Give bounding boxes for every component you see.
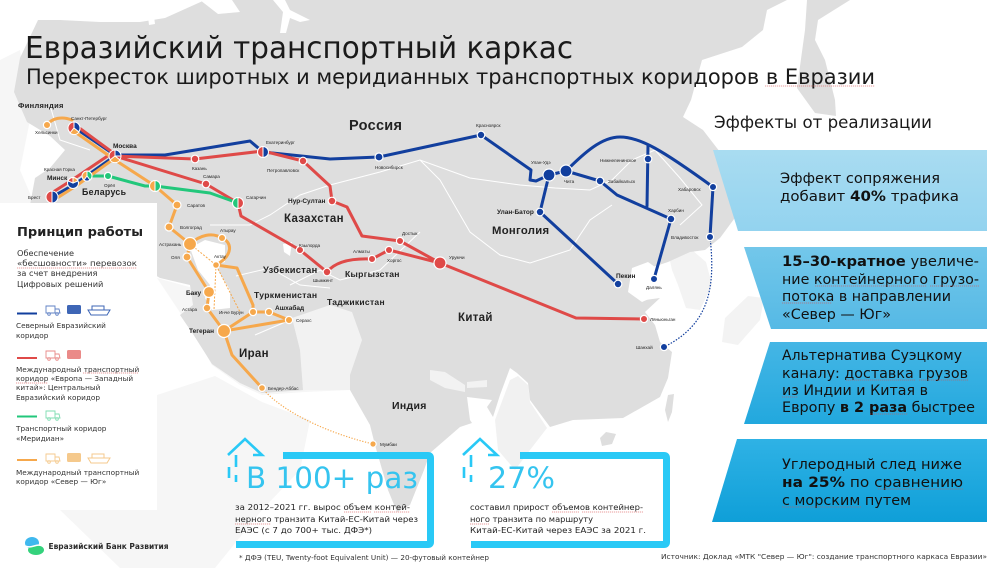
legend: north Eurasian corridor: коридор — [16, 331, 49, 340]
city labels: Екатеринбург — [266, 140, 295, 145]
country labels: Финляндия — [18, 101, 64, 110]
city labels: Шымкент — [313, 278, 334, 283]
country labels: Казахстан — [284, 213, 344, 225]
panel: effect 4: на 25% по сравнению — [782, 475, 963, 491]
panel: effect 3: каналу: доставка грузов — [782, 366, 968, 382]
callout: 100+ times: за 2012–2021 гг. вырос объем контей- — [235, 503, 410, 512]
icon: arrow up — [228, 439, 262, 482]
legend: north Eurasian corridor: Северный Евразийский — [16, 321, 106, 330]
city labels: Саратов — [187, 203, 206, 208]
panel: effect 3: Европу в 2 раза быстрее — [782, 400, 975, 416]
city labels: Баку — [186, 290, 202, 297]
city labels: Пекин — [616, 273, 636, 280]
city labels: Новосибирск — [375, 165, 404, 170]
city labels: Урумчи — [449, 255, 465, 260]
panel: effect 4 — [712, 439, 987, 522]
city labels — [28, 116, 701, 447]
panel: effect 4: с морским путем — [782, 493, 911, 509]
city labels: Ашхабад — [275, 304, 304, 312]
legend: Europe — Western China corridor: китай»: Центральный — [16, 383, 101, 392]
corridor: Meridian (green) — [87, 176, 238, 203]
panel: effect 2: потока в направлении — [782, 289, 951, 305]
city labels: Петропавловск — [267, 168, 300, 173]
city labels: Кзылорда — [299, 243, 321, 248]
legend: Europe — Western China corridor: Евразийский коридор — [16, 393, 100, 402]
country labels: Китай — [458, 312, 493, 324]
corridor: North Eurasian (blue) — [52, 132, 713, 284]
city labels: Астрахань — [159, 242, 182, 247]
city labels: Нижнеленинское — [600, 158, 637, 163]
callout: 27%: Китай-ЕС-Китай через ЕАЭС за 2021 г. — [470, 526, 646, 535]
country labels: Иран — [239, 348, 269, 360]
city labels: Ляньюньган — [650, 317, 676, 322]
callout: 100+ times: ЕАЭС (с 7 до 700+ тыс. ДФЭ*) — [235, 526, 372, 535]
city labels: Далянь — [646, 285, 662, 290]
country labels: Россия — [349, 118, 402, 134]
city labels: Чита — [564, 179, 575, 184]
city labels: Достык — [402, 231, 418, 236]
country labels: Кыргызстан — [345, 269, 400, 279]
legend: Europe — Western China corridor: коридор «Европа — Западный — [16, 374, 133, 383]
callout: 100+ times — [228, 439, 430, 544]
country labels — [18, 101, 549, 412]
city labels: Хабаровск — [678, 187, 701, 192]
panel: how it works legend — [0, 203, 157, 510]
panel: effect 2: «Север — Юг» — [782, 307, 891, 323]
country labels: Туркменистан — [254, 290, 317, 300]
city labels: Астара — [182, 307, 198, 312]
legend: north Eurasian corridor — [16, 305, 110, 340]
city labels: Москва — [113, 143, 137, 150]
callout: 100+ times: нерного транзита Китай-ЕС-Китай через — [235, 515, 418, 524]
country labels: Таджикистан — [327, 297, 385, 307]
panel: effect 2: 15–30-кратное увеличе- — [782, 254, 979, 270]
legend: Meridian corridor: «Меридиан» — [16, 434, 64, 443]
callout: 27%: 27% — [488, 461, 555, 495]
city labels: Волгоград — [180, 225, 202, 230]
legend: Meridian corridor: Транспортный коридор — [15, 424, 107, 433]
city labels: Минск — [47, 175, 68, 182]
panel: effect 3: Альтернатива Суэцкому — [782, 348, 962, 364]
country labels: Монголия — [492, 225, 549, 237]
subtitle: Перекресток широтных и меридианных транспортных коридоров в Евразии — [26, 65, 875, 89]
city labels: Улан-Батор — [497, 209, 534, 216]
source: Источник: Доклад «МТК "Север — Юг": создание транспортного каркаса Евразии» — [661, 553, 987, 561]
panel: effect 2: ние контейнерного грузо- — [782, 272, 979, 288]
legend intro text: Обеспечение — [17, 248, 74, 258]
logo: Eurasian Development Bank: Евразийский Банк Развития — [48, 542, 168, 551]
city labels: Красная Горка — [44, 167, 75, 172]
city labels: Шанхай — [636, 344, 653, 350]
city nodes — [43, 121, 717, 447]
legend: Europe — Western China corridor: Международный транспортный — [16, 365, 139, 374]
legend: North — South corridor — [16, 453, 139, 486]
city labels: Самара — [203, 174, 220, 179]
legend: Europe — Western China corridor — [16, 350, 139, 402]
city labels: Тегеран — [189, 328, 214, 335]
callout: 100+ times: В 100+ раз — [246, 461, 418, 495]
city labels: Улан-Удэ — [531, 160, 551, 165]
city labels: Сагарчин — [246, 195, 266, 200]
city labels: Красноярск — [476, 123, 502, 128]
city labels: Нур-Султан — [288, 198, 326, 205]
country labels: Беларусь — [82, 187, 127, 197]
city labels: Брест — [28, 195, 41, 200]
city labels: Оля — [171, 255, 180, 260]
multi-corridor hubs — [46, 122, 268, 208]
title: Евразийский транспортный каркас — [25, 31, 573, 66]
city labels: Хоргос — [387, 258, 402, 263]
city labels: Мумбаи — [380, 442, 397, 447]
map: corridors — [18, 101, 717, 447]
legend: Meridian corridor — [15, 411, 107, 443]
legend intro text: за счет внедрения — [17, 268, 98, 278]
footnote: * ДФЭ (TEU, Twenty-foot Equivalent Unit) — 20-футовый контейнер — [239, 554, 490, 562]
legend intro text: Цифровых решений — [17, 279, 103, 289]
panel: effect 3 — [744, 342, 987, 424]
legend: North — South corridor: Международный транспортный — [16, 468, 139, 477]
callout frame — [471, 456, 666, 544]
city labels: Атырау — [220, 228, 236, 233]
city labels: Инче Бурун — [219, 310, 244, 315]
legend intro text: «бесшовности» перевозок — [17, 258, 137, 268]
city labels: Хельсинки — [35, 130, 58, 135]
city labels: Серахс — [296, 318, 312, 323]
legend heading: Принцип работы — [17, 225, 143, 239]
callout: 27% — [463, 439, 666, 544]
icon: arrow up — [463, 439, 497, 482]
panel: effect 1: Эффект сопряжения — [780, 171, 940, 187]
panel: effect 1: добавит 40% трафика — [780, 189, 959, 205]
title — [25, 31, 875, 89]
city labels: Казань — [192, 166, 207, 171]
corridor: Europe — Western China (red) — [50, 127, 644, 319]
city labels: Санкт-Петербург — [71, 116, 107, 121]
panel: effect 2 — [744, 247, 987, 329]
callout: 27%: составил прирост объемов контейнер- — [470, 503, 643, 512]
legend: North — South corridor: коридор «Север — Юг» — [16, 477, 106, 486]
city labels: Харбин — [668, 208, 684, 213]
country labels: Индия — [392, 400, 427, 412]
panel: effect 1 — [713, 150, 987, 231]
city labels: Владивосток — [671, 235, 699, 240]
city labels: Забайкальск — [608, 178, 636, 184]
city labels: Орёл — [104, 183, 116, 188]
logo: Eurasian Development Bank — [25, 537, 168, 555]
callout: 27%: ного транзита по маршруту — [470, 515, 593, 524]
corridor: North — South (orange) — [47, 118, 712, 444]
panel: effect 3: из Индии и Китая в — [782, 383, 928, 399]
city labels: Бендер-Аббас — [268, 386, 299, 391]
panel: effect 4: Углеродный след ниже — [782, 457, 962, 473]
legend intro text — [17, 248, 137, 289]
country labels: Узбекистан — [263, 265, 318, 275]
city labels: Алматы — [353, 249, 370, 254]
heading: effects: Эффекты от реализации — [714, 113, 932, 133]
city labels: Актау — [214, 254, 227, 259]
callout frame — [236, 456, 430, 544]
